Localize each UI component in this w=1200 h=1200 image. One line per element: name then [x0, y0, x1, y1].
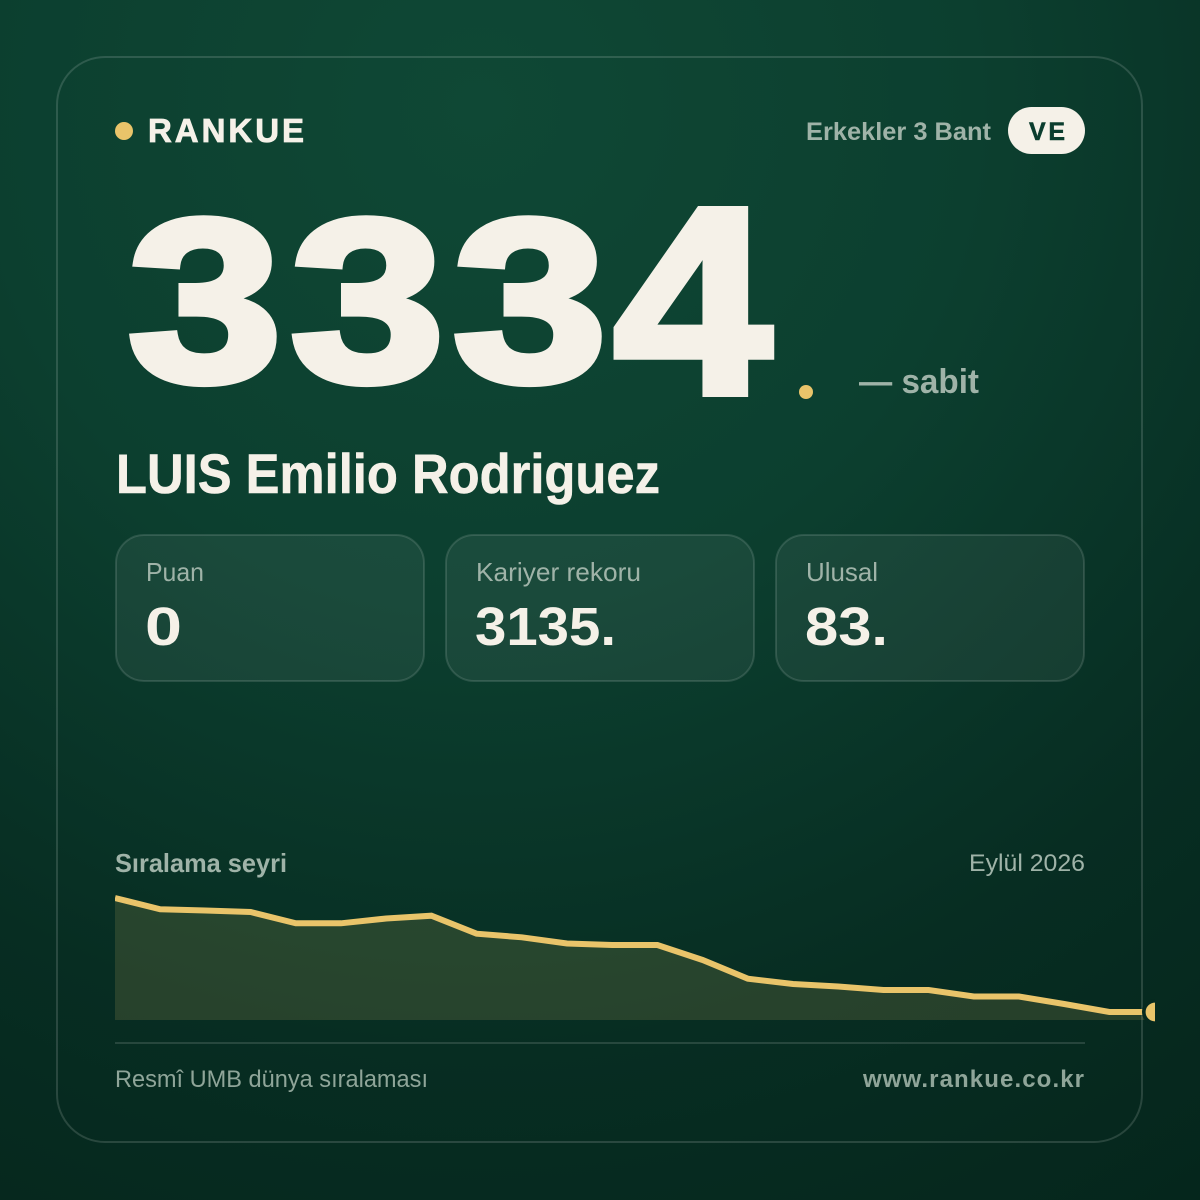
brand header: RANKUE — [148, 112, 304, 149]
stat card: Ulusal — [776, 535, 1084, 681]
footer url: www.rankue.co.kr — [862, 1066, 1084, 1093]
ranking line chart — [115, 898, 1166, 1023]
player name: LUIS Emilio Rodriguez — [116, 442, 660, 505]
stat card: Ulusal: 83. — [805, 597, 888, 657]
big rank number: 4 — [614, 153, 773, 450]
country badge — [1008, 107, 1085, 154]
big rank number: 333 — [128, 172, 616, 430]
stat card: Ulusal: Ulusal — [806, 557, 878, 587]
rank change label: — sabit — [859, 363, 979, 401]
footer source: Resmî UMB dünya sıralaması — [115, 1066, 428, 1093]
chart date: Eylül 2026 — [969, 850, 1085, 877]
footer rule — [115, 1042, 1085, 1044]
category label: Erkekler 3 Bant — [806, 118, 992, 146]
stat card: Puan — [116, 535, 424, 681]
stat card: Kariyer rekoru: Kariyer rekoru — [476, 557, 641, 587]
stat card: Kariyer rekoru: 3135. — [475, 597, 616, 657]
country badge: VE — [1029, 118, 1065, 146]
stat card: Puan: Puan — [146, 557, 204, 587]
stat card: Kariyer rekoru — [446, 535, 754, 681]
big rank number — [129, 206, 774, 397]
stat card: Puan: 0 — [145, 597, 182, 657]
rank dot — [799, 385, 813, 399]
chart title: Sıralama seyri — [115, 848, 287, 878]
